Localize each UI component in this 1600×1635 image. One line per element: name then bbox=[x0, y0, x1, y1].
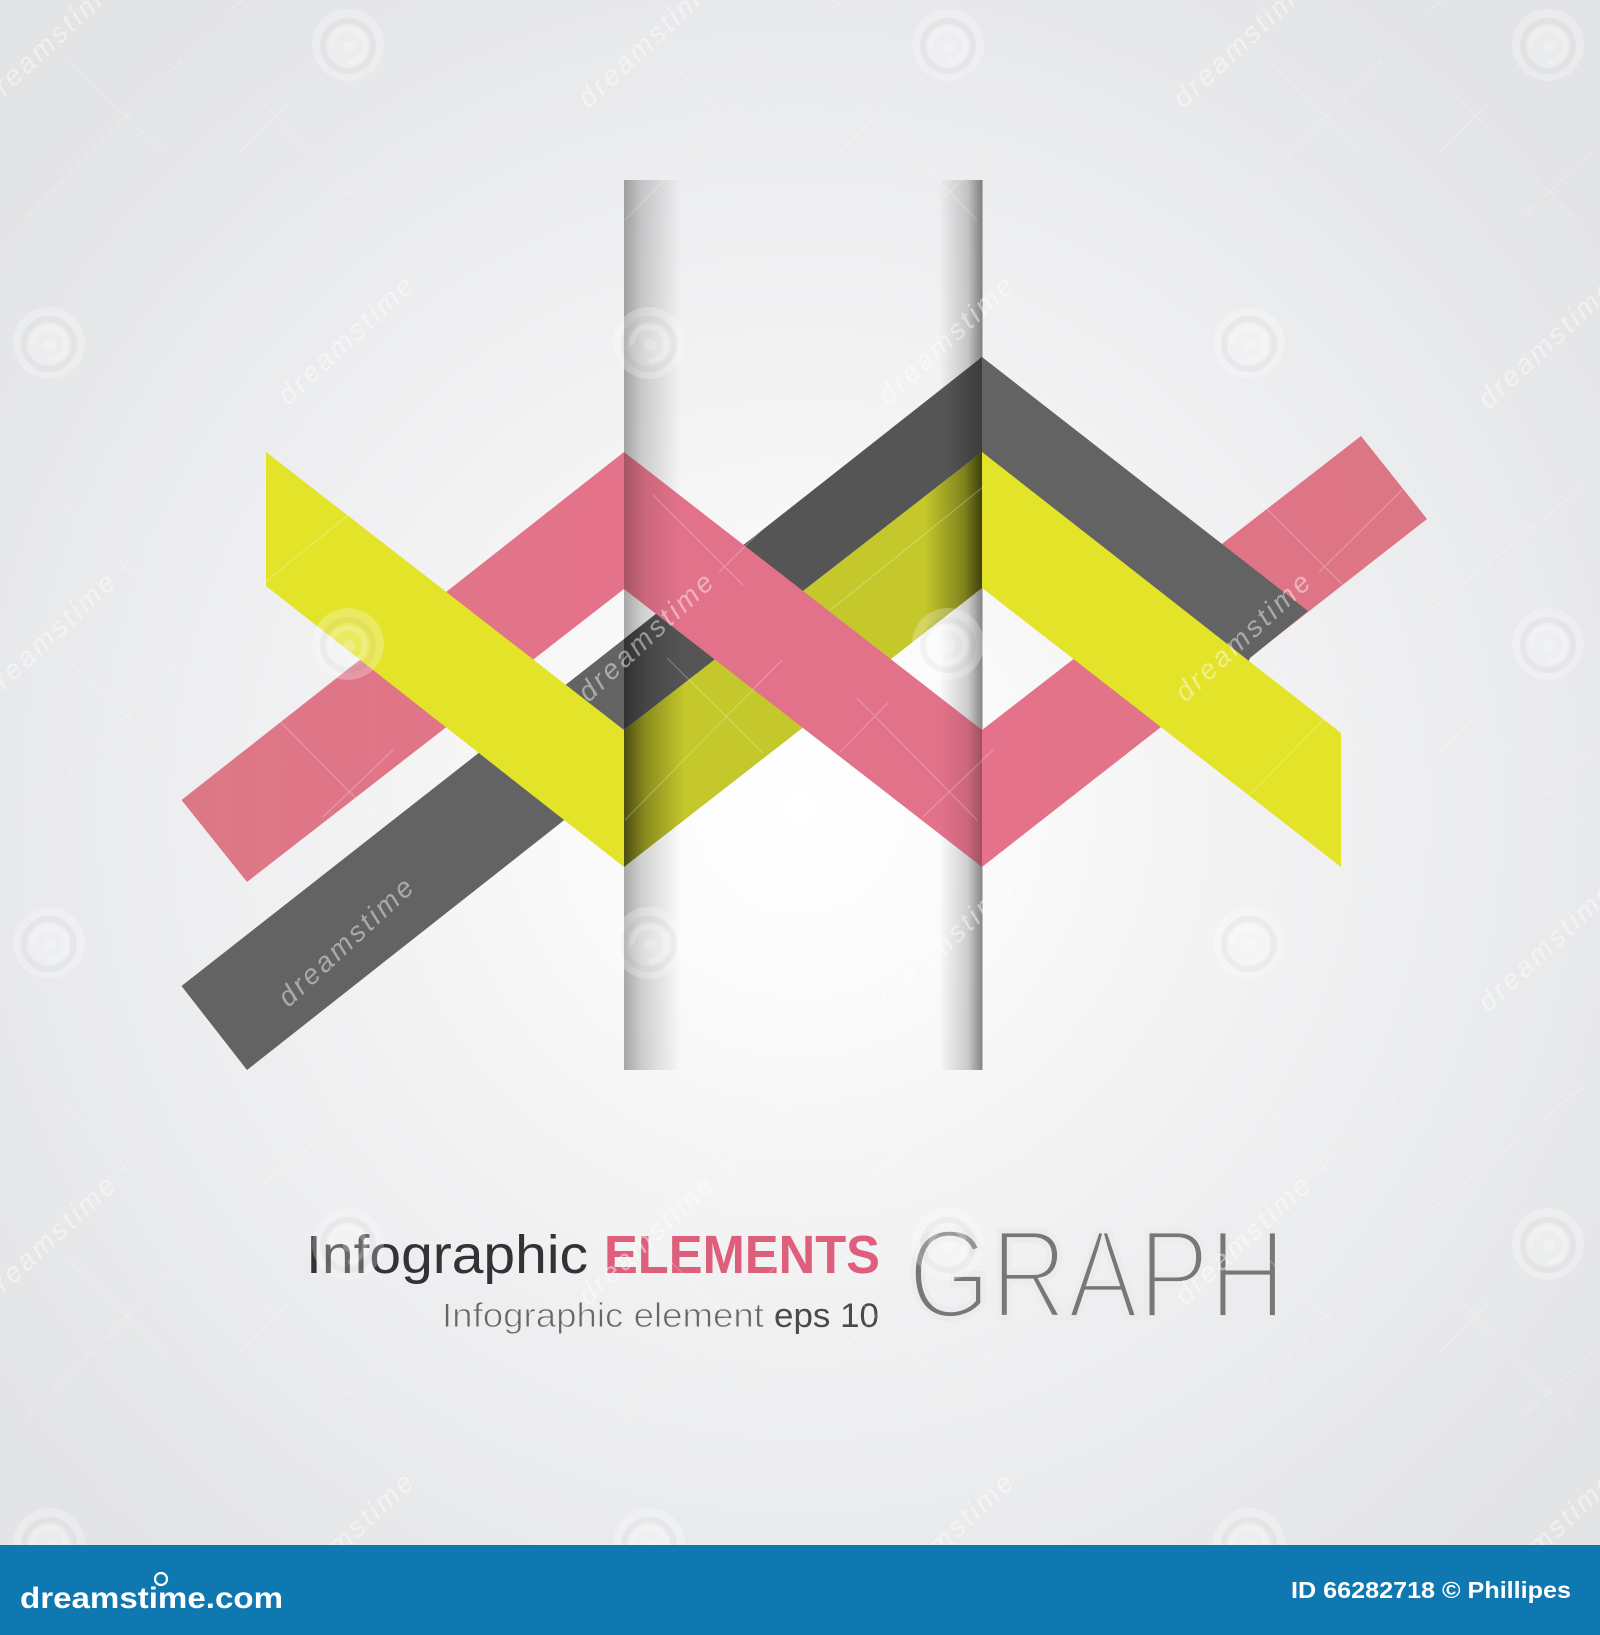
footer bar bbox=[0, 1545, 1600, 1635]
ribbon chart bbox=[182, 357, 1427, 1070]
title: GRAPH: GRAPH bbox=[908, 1203, 1286, 1345]
heading: Infographic ELEMENTS bbox=[306, 1225, 880, 1285]
watermark text: dreamstime bbox=[871, 1465, 1022, 1607]
subheading: Infographic element eps 10: Infographic element bbox=[442, 1297, 765, 1335]
watermark text: dreamstime bbox=[571, 1168, 722, 1310]
footer credit: ID 66282718 © Phillipes bbox=[1291, 1577, 1571, 1603]
heading: Infographic ELEMENTS: ELEMENTS bbox=[604, 1225, 880, 1285]
watermark text: dreamstime bbox=[871, 268, 1022, 410]
olive ribbon: band segment bbox=[624, 452, 982, 867]
grey ribbon: left segment bbox=[182, 639, 624, 1070]
footer logo text: dreamstime.com bbox=[20, 1582, 283, 1615]
grey ribbon: right segment bbox=[982, 357, 1308, 680]
watermark text: dreamstime bbox=[271, 870, 422, 1012]
watermark text: dreamstime bbox=[871, 870, 1022, 1012]
pink ribbon: band segment bbox=[624, 452, 982, 867]
watermark text: dreamstime bbox=[1168, 565, 1319, 707]
pink ribbon: left segment bbox=[182, 452, 624, 882]
grey ribbon: band segment bbox=[624, 357, 982, 730]
pink ribbon: right segment bbox=[982, 436, 1427, 867]
vertical band with inner shadows bbox=[624, 180, 982, 1070]
watermark text: dreamstime bbox=[271, 268, 422, 410]
watermark text: dreamstime bbox=[1168, 1168, 1319, 1310]
subheading: Infographic element eps 10 bbox=[442, 1297, 879, 1335]
yellow ribbon: right segment bbox=[982, 452, 1341, 867]
watermark text: dreamstime bbox=[571, 565, 722, 707]
footer logo spiral bbox=[155, 1573, 167, 1585]
yellow ribbon: left segment bbox=[266, 452, 624, 867]
subheading: Infographic element eps 10: eps 10 bbox=[774, 1297, 879, 1335]
heading: Infographic ELEMENTS: Infographic bbox=[306, 1225, 588, 1285]
watermark text: dreamstime bbox=[271, 1465, 422, 1607]
